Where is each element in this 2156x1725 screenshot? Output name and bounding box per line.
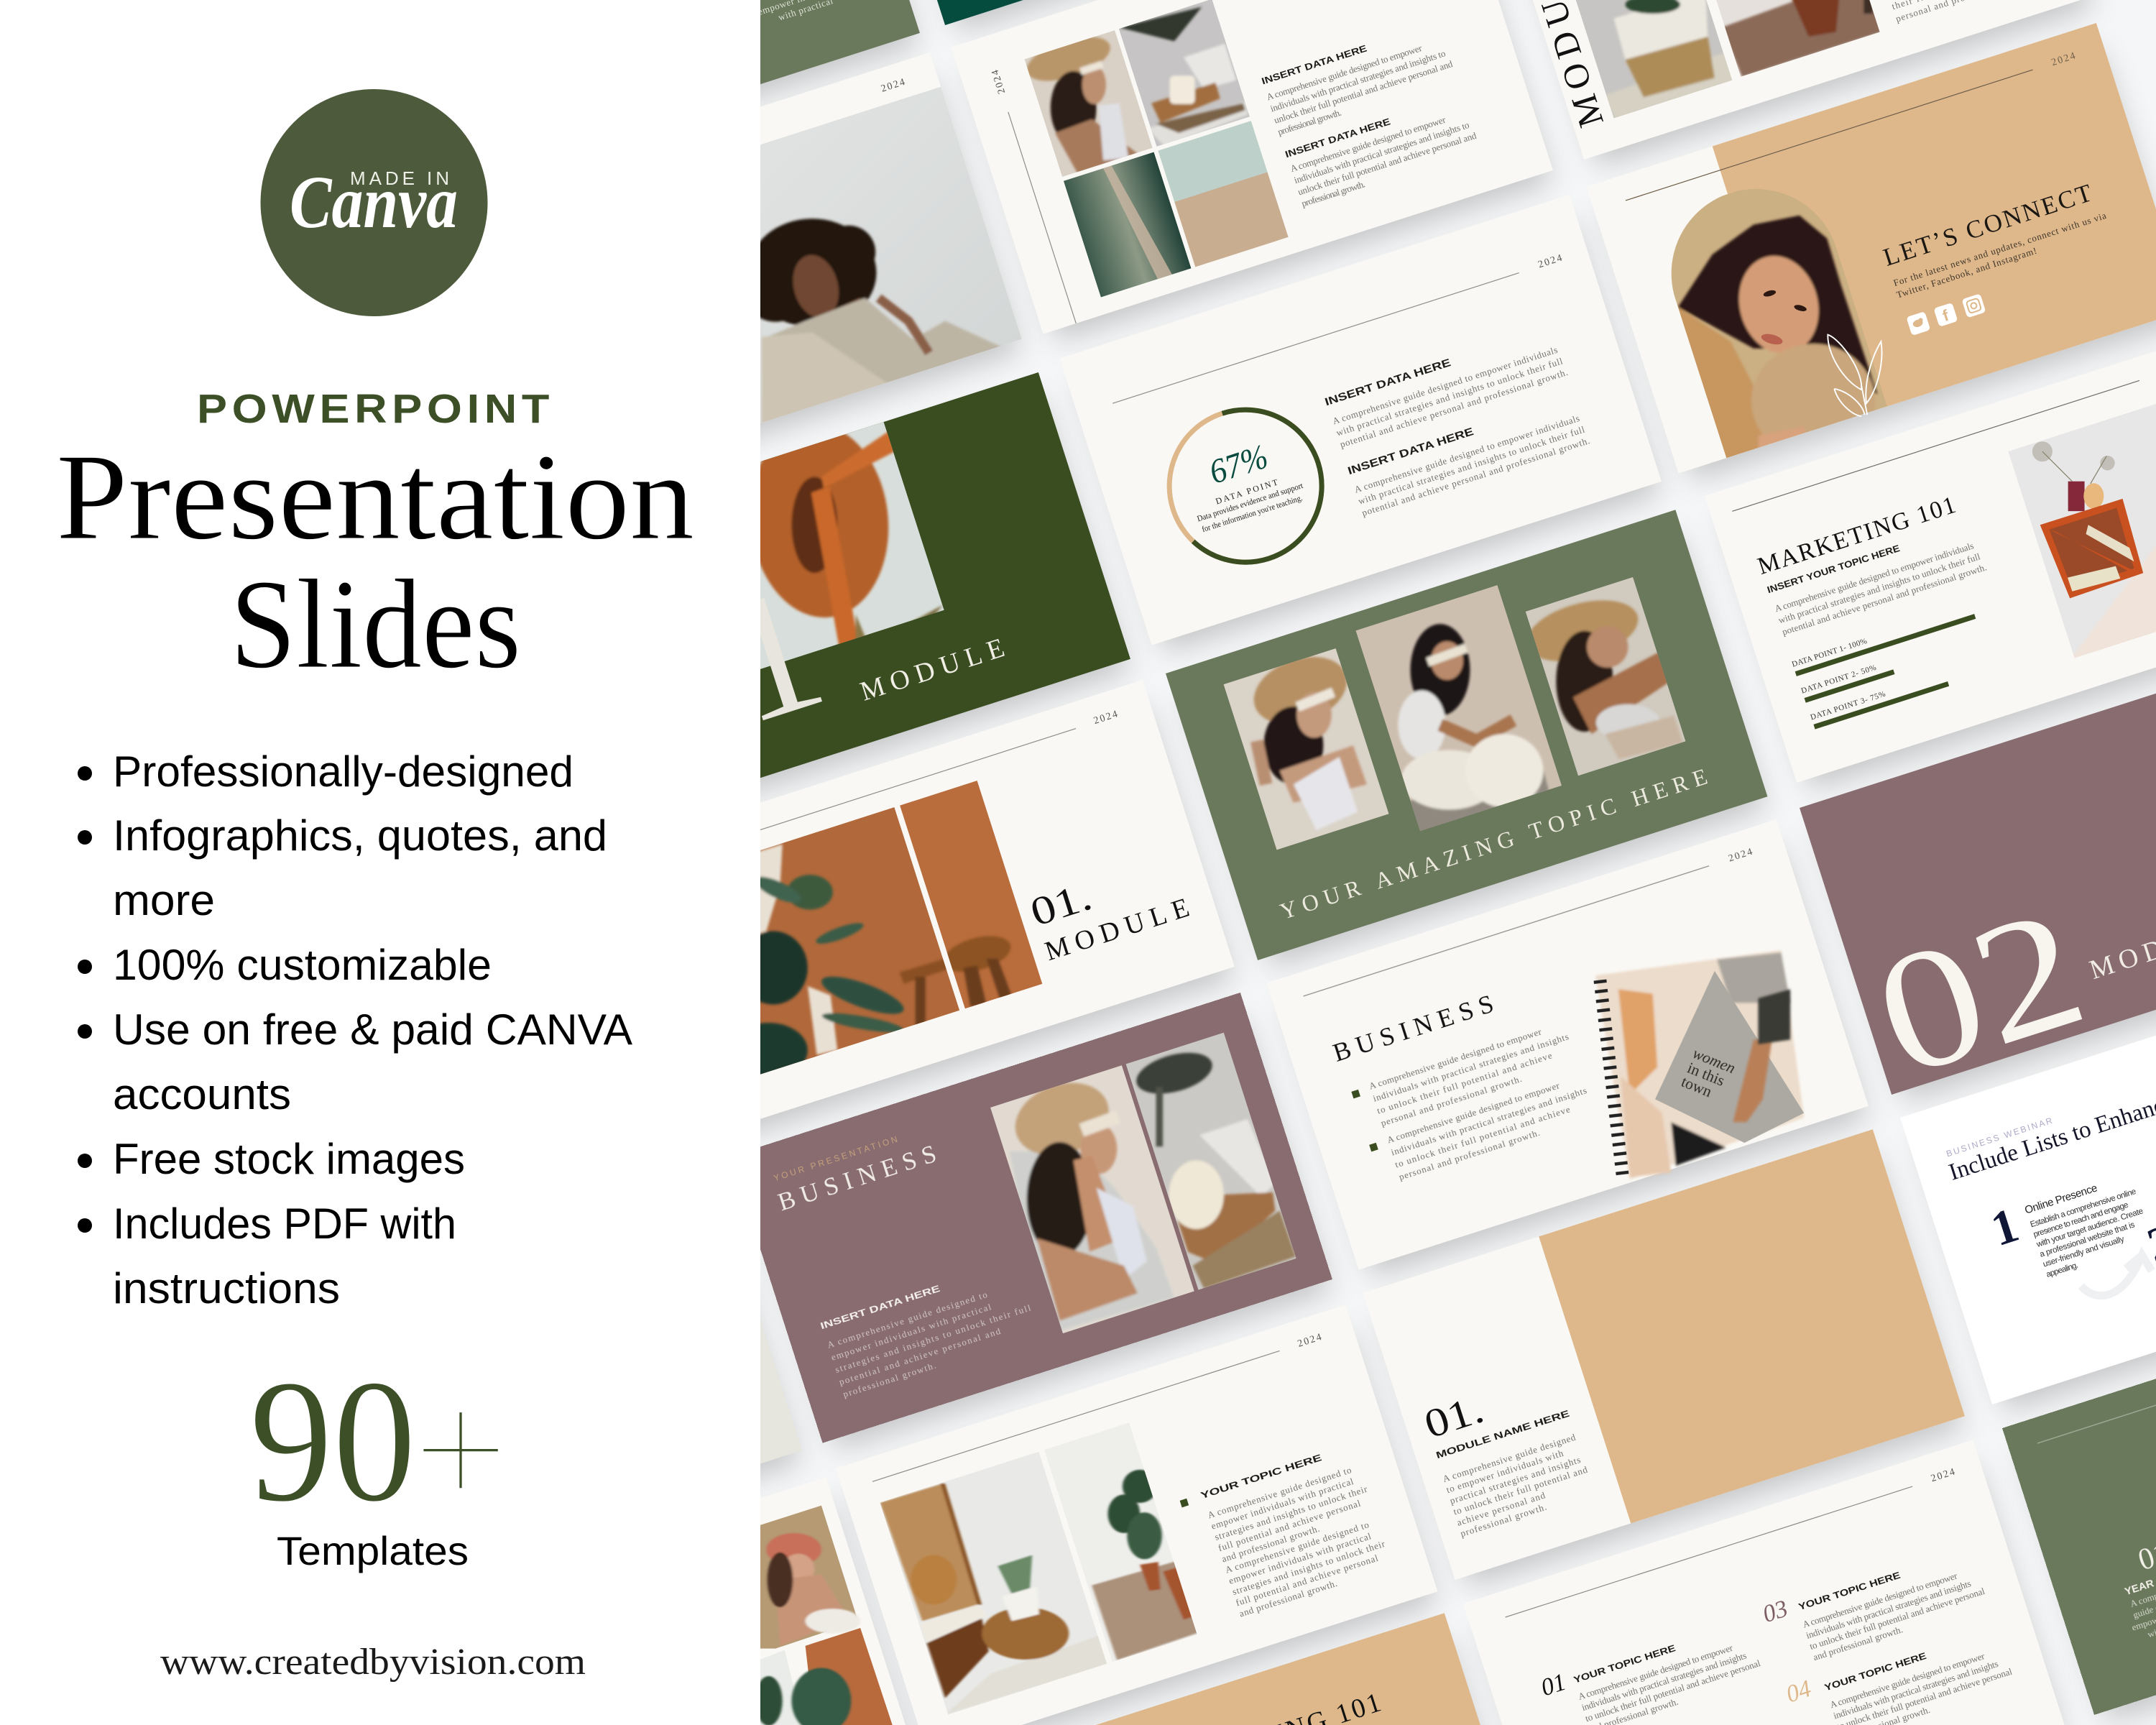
slide: tan marketing bottom [934,1613,1537,1725]
title: your amazing topic: YOUR AMAZING TOPIC HERE [1277,763,1710,924]
item: topic 03: and professional growth. [1812,1624,1904,1662]
slide: olive year [2002,1264,2156,1715]
slide: data point circle: 2024 [1537,252,1565,270]
text block: module body [1442,1431,1596,1539]
text block: second data: A comprehensive guide designed to empower individuals [1353,413,1581,495]
photo: bench and wicker stool [813,1417,1177,1725]
text block: topic body: and professional growth. [1238,1578,1338,1619]
icon: twitter [1906,311,1930,336]
text block: marketing body: with practical strategies and insights to unlock their full [1777,551,1981,625]
item: topic 01: YOUR TOPIC HERE [1572,1642,1677,1685]
photo: candle and plant [1119,0,1250,147]
photo: plant on terracotta wall [642,779,1020,1149]
icon: instagram [1961,293,1986,318]
slide: 01 module terracotta [632,680,1240,1149]
text block: module body: professional growth. [1459,1501,1548,1539]
slide: grey beige partial [200,1164,802,1614]
text block: business body: A comprehensive guide designed to [826,1289,988,1351]
photo: beach [1158,121,1289,267]
text block: data two [1289,106,1482,209]
slide: four numbered topics [1463,1440,2065,1725]
photo: spiral notebook with book: in this [1685,1059,1727,1090]
slide: 02 module mauve [1800,644,2156,1117]
heading: insert data: INSERT DATA HERE [819,1283,941,1331]
text block: topic body: strategies and insights to unlock their [1213,1484,1369,1542]
text block: first data: with practical strategies and insights to unlock their full [1335,355,1564,438]
text block: second data: with practical strategies and insights to unlock their full [1357,424,1586,507]
badge: made in canva: Canva [290,161,458,244]
photo: palm leaf [1064,152,1192,298]
photo: hat on chair [760,422,944,669]
numeral: one: 1 [1985,1197,2024,1256]
text block: data two: professional growth. [1300,178,1366,209]
text block: data two: unlock their full potential and achieve personal and [1296,130,1478,197]
slide: your topic two photos [804,1305,1443,1725]
photo: woman in sunglasses seated [1335,571,1621,882]
text block: topic body [1206,1461,1393,1619]
text block: online presence body [2029,1187,2154,1279]
item: topic 03 [1759,1536,1990,1673]
text block: business body: potential and achieve personal and [838,1325,1002,1387]
text block: business first: individuals with practical strategies and insights [1371,1031,1570,1104]
text block: first data: potential and achieve personal and professional growth. [1339,367,1569,450]
slide: let's connect [1593,23,2156,473]
text block: topic body: empower individuals with practical [1227,1530,1373,1586]
photo: woman in arch [1604,152,1950,521]
text block: topic body: full potential and achieve personal [1217,1498,1362,1553]
title: presentation slides: Presentation [56,429,694,566]
stat: 90 plus templates: 90 [249,1343,416,1538]
text block: module body: to empower individuals with [1445,1448,1565,1495]
list: feature bullets: Free stock images [113,1135,465,1183]
text block: module body: achieve personal and [1455,1489,1547,1528]
heading: insert data: INSERT DATA HERE [1260,42,1368,86]
photo: spiral notebook with book: town [1679,1073,1714,1100]
item: topic 01: to unlock their full potential and achieve personal [1584,1657,1762,1724]
item: topic 01: A comprehensive guide designed to empower [1577,1642,1734,1702]
text block: business first: personal and professional growth. [1379,1073,1523,1128]
item: topic 04: 04 [1783,1675,1815,1708]
slide: woman portrait: 2024 [880,76,908,95]
slide: marketing 101 [1705,332,2156,819]
text block: online presence body: user-friendly and visually [2042,1235,2126,1269]
text block: module body: practical strategies and insights [1448,1454,1582,1506]
list: feature bullets: Professionally-designed [113,748,573,796]
heading: insert data second: INSERT DATA HERE [1346,426,1475,477]
slide: mauve business [730,981,1368,1447]
text block: data one: professional growth. [1276,107,1342,137]
text block: topic body: strategies and insights to unlock their [1231,1538,1386,1597]
label: business webinar: BUSINESS WEBINAR [1945,1116,2054,1159]
text block: second data: potential and achieve personal and professional growth. [1360,435,1591,518]
title: 01.: 01. [1026,874,1097,935]
panel: left info column [0,0,760,1725]
list: feature bullets [78,748,632,1312]
text block: business first: to unlock their full potential and achieve [1376,1050,1554,1116]
chart: 67 percent ring [1150,390,1341,581]
item: topic 01 [1538,1610,1765,1725]
item: topic 04 [1783,1615,2017,1725]
title: business: BUSINESS [775,1139,940,1216]
list: feature bullets: Use on free & paid CANVA [113,1006,632,1054]
photo: tall plant in terracotta pot [1026,1405,1260,1693]
text block: online presence body: Establish a comprehensive online [2030,1187,2137,1229]
icon: green diamond [1351,1090,1360,1098]
icon: leaf outline [1828,335,1881,416]
text block: first data: A comprehensive guide designed to empower individuals [1331,344,1559,426]
photo: orange shelf [1961,378,2156,741]
label: powerpoint: POWERPOINT [197,386,554,432]
bar chart: data points: DATA POINT 1- 100% [1791,637,1868,669]
arrow: pale swoosh [2078,1254,2155,1302]
item: topic 03: YOUR TOPIC HERE [1797,1570,1902,1612]
text block: connect body: For the latest news and updates, connect with us via [1892,210,2108,288]
photo: spiral notebook with book: women [1690,1044,1738,1077]
item: topic 04: individuals with practical strategies and insights [1832,1658,1999,1721]
photo: candle and book [1061,998,1367,1336]
photo: curly haired woman [760,87,1022,423]
item: topic 03: 03 [1759,1595,1791,1628]
list: feature bullets: 100% customizable [113,941,492,989]
text block: data one: individuals with practical strategies and insights to [1269,47,1447,114]
text block: topic body [1890,0,2038,24]
text block: online presence body: with your target audience. Create [2035,1207,2145,1249]
text block: data one: unlock their full potential and achieve personal and [1273,58,1455,126]
text block: marketing body: potential and achieve personal and professional growth. [1781,561,1988,638]
title: marketing 101: MARKETING 101 [1754,492,1959,580]
badge: made in canva: MADE IN [350,167,449,189]
slide: your amazing topic [1165,507,1767,960]
slide: white list webinar [1900,954,2156,1404]
text block: online presence body: appealing. [2045,1261,2079,1279]
text block: marketing body: A comprehensive guide designed to empower individuals [1773,540,1975,614]
slide: 01 module name tan [1363,1129,1965,1580]
text block: module body: A comprehensive guide designed [1442,1432,1577,1484]
text block: data two: individuals with practical strategies and insights to [1293,119,1470,185]
title: business: BUSINESS [1330,989,1497,1067]
bar chart: data points [1791,603,1993,730]
text block: year body [2123,1577,2156,1644]
slide: olive text sliver [318,0,920,197]
photo: collage cells [752,1506,893,1725]
title: module: MODULE [1041,893,1193,967]
heading: insert data: INSERT DATA HERE [1323,356,1452,408]
heading: your topic: YOUR TOPIC HERE [1199,1452,1323,1501]
icon: facebook: f [1940,306,1951,325]
text block: topic body: empower individuals with practical [1210,1476,1355,1532]
icon: facebook [1933,303,1958,327]
text block: topic body: A comprehensive guide designed to [1206,1464,1353,1520]
stat: 90 plus templates [249,1343,510,1573]
slide: dark green module [760,372,1130,778]
slide: photo grid with data: 2024 [990,67,1008,95]
item: topic 03: A comprehensive guide designed to empower [1801,1570,1959,1630]
slide: let's connect: 2024 [2050,50,2078,68]
slide: module with plant pots [1533,0,2081,160]
slide: four numbered topics: 2024 [1930,1466,1958,1484]
text block: data two: A comprehensive guide designed to empower [1289,114,1447,174]
slide: photo grid with data [952,0,1553,334]
heading: online presence: Online Presence [2023,1182,2099,1217]
list: feature bullets: accounts [113,1070,291,1118]
list: feature bullets: instructions [113,1264,340,1312]
bar chart: data points: DATA POINT 3- 75% [1810,690,1886,722]
text block: business body: professional growth. [842,1360,937,1399]
chart: 67 percent ring: DATA POINT [1215,477,1279,506]
item: topic 03: to unlock their full potential and achieve personal [1808,1586,1986,1652]
list: feature bullets: Includes PDF with [113,1200,456,1248]
text block: business body: strategies and insights to unlock their full [834,1302,1032,1375]
url: website: www.createdbyvision.com [160,1642,586,1683]
list: feature bullets: more [113,876,215,924]
text block: business first: A comprehensive guide designed to empower [1368,1026,1543,1092]
stat: 90 plus templates: Templates [277,1528,469,1573]
photo: woman in hat one [1191,609,1421,866]
text block: business second [1386,1072,1596,1182]
photo: terracotta pot on floor [1716,0,1880,76]
text block: business second: individuals with practical strategies and insights [1390,1085,1588,1158]
text block: data one [1265,34,1458,137]
title: module: MODULE [857,632,1008,707]
photo: woman with sunglasses [928,1021,1251,1384]
item: topic 04: YOUR TOPIC HERE [1823,1650,1928,1693]
heading: insert your topic: INSERT YOUR TOPIC HERE [1766,543,1902,595]
slide: business with notebook [1266,819,1884,1317]
stat: 90 plus templates: + [412,1352,510,1547]
item: topic 01: individuals with practical strategies and insights [1580,1650,1748,1713]
text block: topic body: A comprehensive guide designed to [1224,1519,1370,1576]
slide: your topic two photos: 2024 [1296,1332,1325,1350]
heading: module name: MODULE NAME HERE [1434,1408,1571,1460]
slide: collage lower left [316,1460,970,1725]
numeral: one: 1 [701,549,844,761]
photo: woman in hat shadowed [1470,542,1733,806]
title: let's connect: LET’S CONNECT [1880,178,2095,272]
text block: online presence body: a professional website that is [2039,1220,2136,1259]
chart: 67 percent ring: 67% [1204,437,1273,492]
panel: tan block [1539,1129,1965,1523]
chart: 67 percent ring: Data provides evidence and support [1196,482,1304,524]
text block: business first [1368,1018,1577,1128]
item: topic 01: 01 [1538,1669,1570,1701]
title: presentation slides [56,429,694,695]
badge: made in canva [260,89,487,316]
text block: topic body: and professional growth. [1220,1523,1321,1564]
text block: business second: A comprehensive guide designed to empower [1386,1080,1561,1145]
photo: woven basket plant [1575,0,1732,118]
text block: data one: A comprehensive guide designed to empower [1265,42,1424,102]
item: topic 03: individuals with practical strategies and insights [1805,1578,1972,1641]
title: presentation slides: Slides [230,553,521,695]
slide: business with notebook: 2024 [1727,846,1755,864]
text block: business second: to unlock their full potential and achieve [1393,1103,1572,1170]
bar chart: data points: DATA POINT 2- 50% [1800,663,1877,696]
numeral: 02: 02 [1855,871,2104,1113]
text block: business second: personal and professional growth. [1398,1127,1541,1182]
text block: online presence body: presence to reach and engage [2032,1201,2129,1239]
photo: spiral notebook with book [1595,950,1804,1179]
slide: woman portrait [760,53,1022,423]
text block: business body [826,1277,1040,1399]
text block: connect body: Twitter, Facebook, and Instagram! [1895,245,2038,300]
item: topic 04: A comprehensive guide designed to empower [1828,1650,1986,1710]
slide: 01 module terracotta: 2024 [1092,709,1120,727]
text block: topic body: full potential and achieve personal [1235,1552,1380,1608]
label: your presentation: YOUR PRESENTATION [773,1134,898,1183]
icon: green diamond [1180,1499,1189,1507]
panel: tan block [1713,23,2156,433]
photo: stool on terracotta wall [877,781,1046,1029]
list: feature bullets: Infographics, quotes, and [113,811,607,860]
text block: module body: to unlock their full potential and [1452,1464,1589,1517]
heading: insert data second: INSERT DATA HERE [1284,116,1392,160]
title: 01.: 01. [1419,1386,1489,1448]
slide: data point circle [1059,195,1662,645]
photo: woman in straw hat [1025,30,1153,177]
chart: 67 percent ring: for the information you're teaching. [1201,494,1304,534]
slide: dark teal [853,0,1455,25]
text block: business body: empower individuals with practical [830,1301,992,1363]
icon: green diamond second [1369,1143,1378,1151]
